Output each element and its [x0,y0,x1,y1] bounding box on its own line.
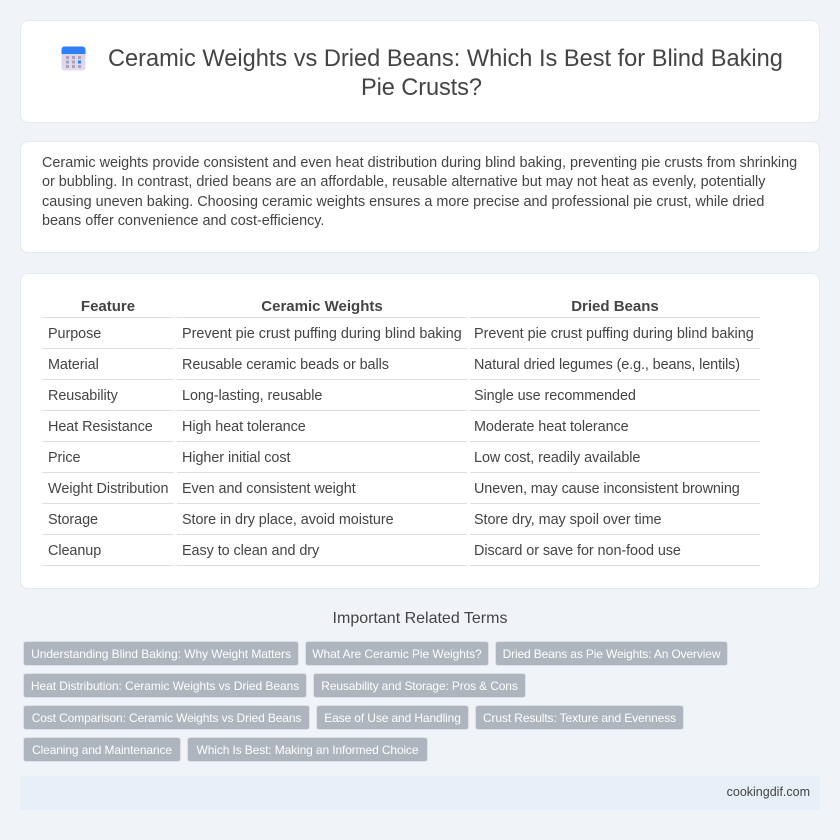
related term tags: What Are Ceramic Pie Weights? [312,647,482,661]
comparison table: Heat Resistance [48,419,153,435]
comparison table: Ceramic Weights [261,298,383,315]
title: Pie Crusts? [361,75,482,101]
heading: related terms: Important Related Terms [333,610,507,627]
comparison table: Store in dry place, avoid moisture [182,512,394,528]
comparison table: Natural dried legumes (e.g., beans, lentils) [474,357,740,373]
comparison table: Discard or save for non-food use [474,543,681,559]
comparison table: Dried Beans [571,298,659,315]
summary text: causing uneven baking. Choosing ceramic weights ensures a more precise and professional pie crust, while dried [42,194,764,210]
summary text: Ceramic weights provide consistent and even heat distribution during blind baking, preventing pie crusts from shrinking [42,155,797,171]
footer bar [20,776,820,810]
related term tags: Cleaning and Maintenance [32,743,172,757]
related term tags: Crust Results: Texture and Evenness [483,711,676,725]
comparison table: Feature [81,298,135,315]
summary text: beans offer convenience and cost-efficiency. [42,213,324,229]
comparison table: Prevent pie crust puffing during blind baking [182,326,462,342]
comparison table: Material [48,357,99,373]
comparison table: Purpose [48,326,101,342]
panel: comparison table [20,273,820,589]
summary text [42,155,797,229]
panel: summary [20,141,820,253]
summary text: or bubbling. In contrast, dried beans are an affordable, reusable alternative but may not heat as evenly, potentially [42,174,765,190]
related term tags: Cost Comparison: Ceramic Weights vs Dried Beans [32,711,301,725]
comparison table [42,298,760,566]
related term tags: Understanding Blind Baking: Why Weight Matters [31,647,291,661]
comparison table: Even and consistent weight [182,481,356,497]
comparison table: Low cost, readily available [474,450,640,466]
footer source: cookingdif.com [727,785,810,799]
comparison table: Long-lasting, reusable [182,388,322,404]
comparison table: Reusability [48,388,118,404]
related term tags: Which Is Best: Making an Informed Choice [197,743,418,757]
related term tags: Ease of Use and Handling [324,711,461,725]
comparison table: Single use recommended [474,388,636,404]
comparison table: Reusable ceramic beads or balls [182,357,389,373]
comparison table: High heat tolerance [182,419,306,435]
comparison table: Moderate heat tolerance [474,419,629,435]
comparison table: Cleanup [48,543,101,559]
comparison table: Prevent pie crust puffing during blind baking [474,326,754,342]
comparison table: Price [48,450,80,466]
icon: calendar [62,46,86,70]
related term tags [23,641,728,762]
comparison table: Store dry, may spoil over time [474,512,661,528]
title [108,46,783,101]
comparison table: Easy to clean and dry [182,543,319,559]
comparison table: Storage [48,512,98,528]
related term tags: Dried Beans as Pie Weights: An Overview [503,647,720,661]
comparison table: Weight Distribution [48,481,169,497]
header panel [20,20,820,123]
comparison table: Higher initial cost [182,450,290,466]
related term tags: Reusability and Storage: Pros & Cons [321,679,518,693]
comparison table: Uneven, may cause inconsistent browning [474,481,740,497]
title: Ceramic Weights vs Dried Beans: Which Is Best for Blind Baking [108,46,783,72]
related term tags: Heat Distribution: Ceramic Weights vs Dried Beans [31,679,299,693]
